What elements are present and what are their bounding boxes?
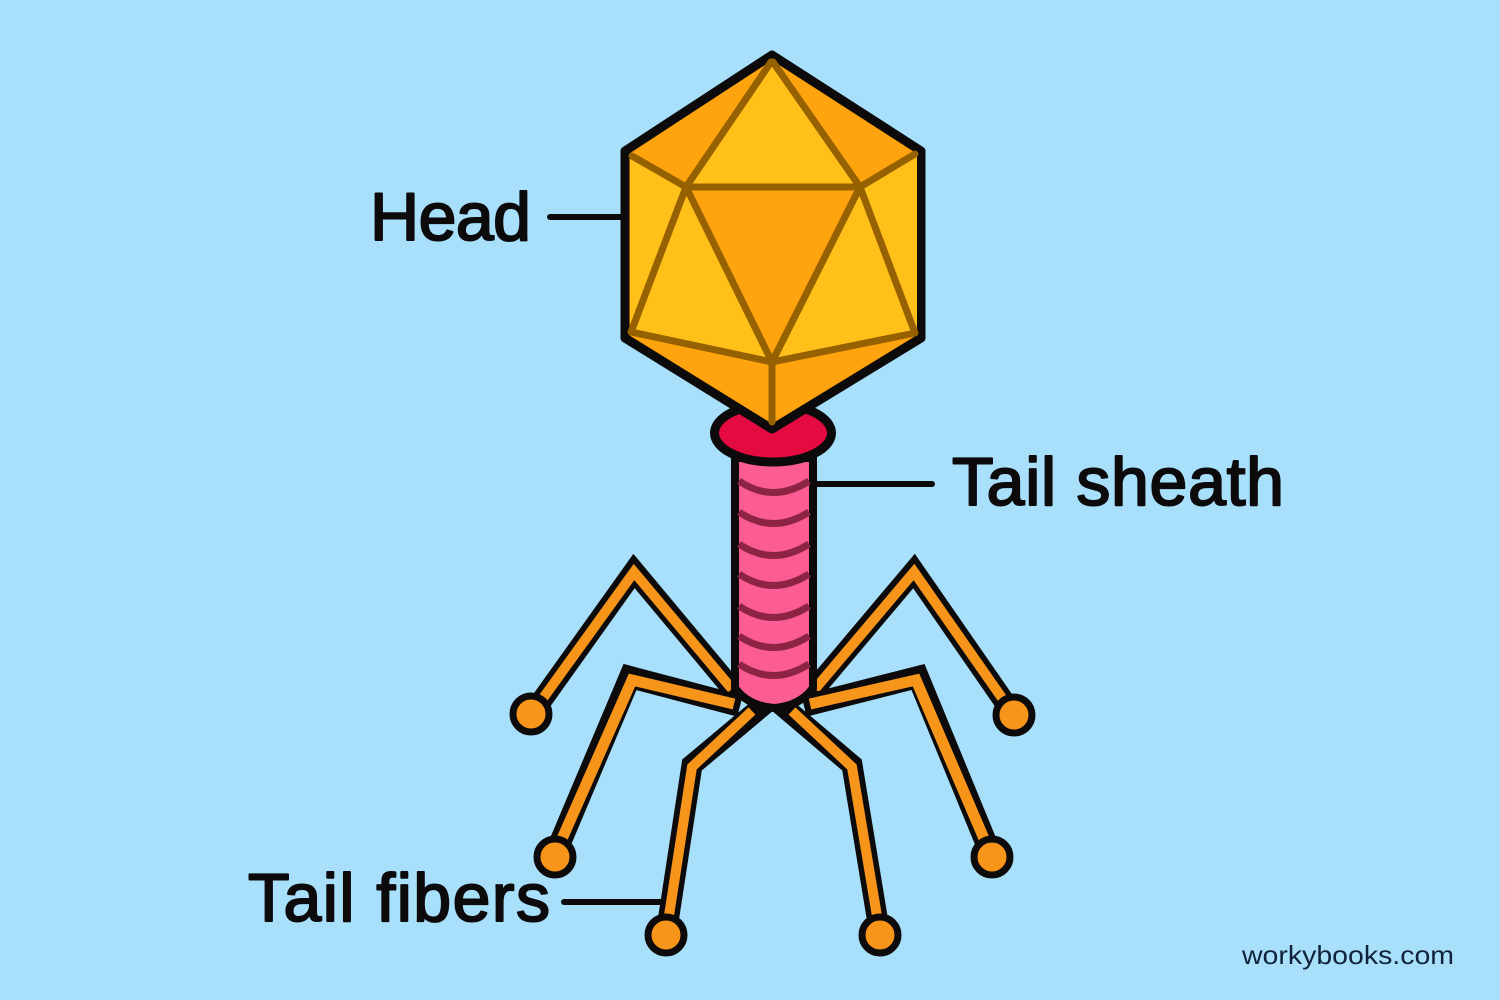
head: icosahedral capsid: [625, 55, 921, 429]
fiber: upper left: [513, 571, 735, 732]
tail sheath: [735, 458, 813, 708]
fiber: middle right: [804, 677, 1010, 875]
label: Tail sheath: Tail sheath: [952, 444, 1284, 520]
leader line: tail fibers: [564, 899, 660, 905]
fiber: lower left: [648, 703, 766, 953]
sheath ridges: [739, 481, 809, 676]
watermark: workybooks.com: [1241, 940, 1454, 970]
collar: [714, 404, 832, 462]
lighter capsid faces: [630, 60, 917, 362]
fiber: lower right: [779, 703, 898, 953]
leader line: head: [550, 214, 624, 220]
leader line: tail sheath: [815, 481, 932, 487]
capsid facet edges: [631, 62, 915, 422]
label: Head: Head: [370, 179, 531, 255]
fiber: middle left: [537, 677, 740, 875]
fiber: upper right: [812, 571, 1032, 733]
tail fibers: [513, 571, 1032, 953]
label: Tail fibers: Tail fibers: [248, 860, 550, 936]
